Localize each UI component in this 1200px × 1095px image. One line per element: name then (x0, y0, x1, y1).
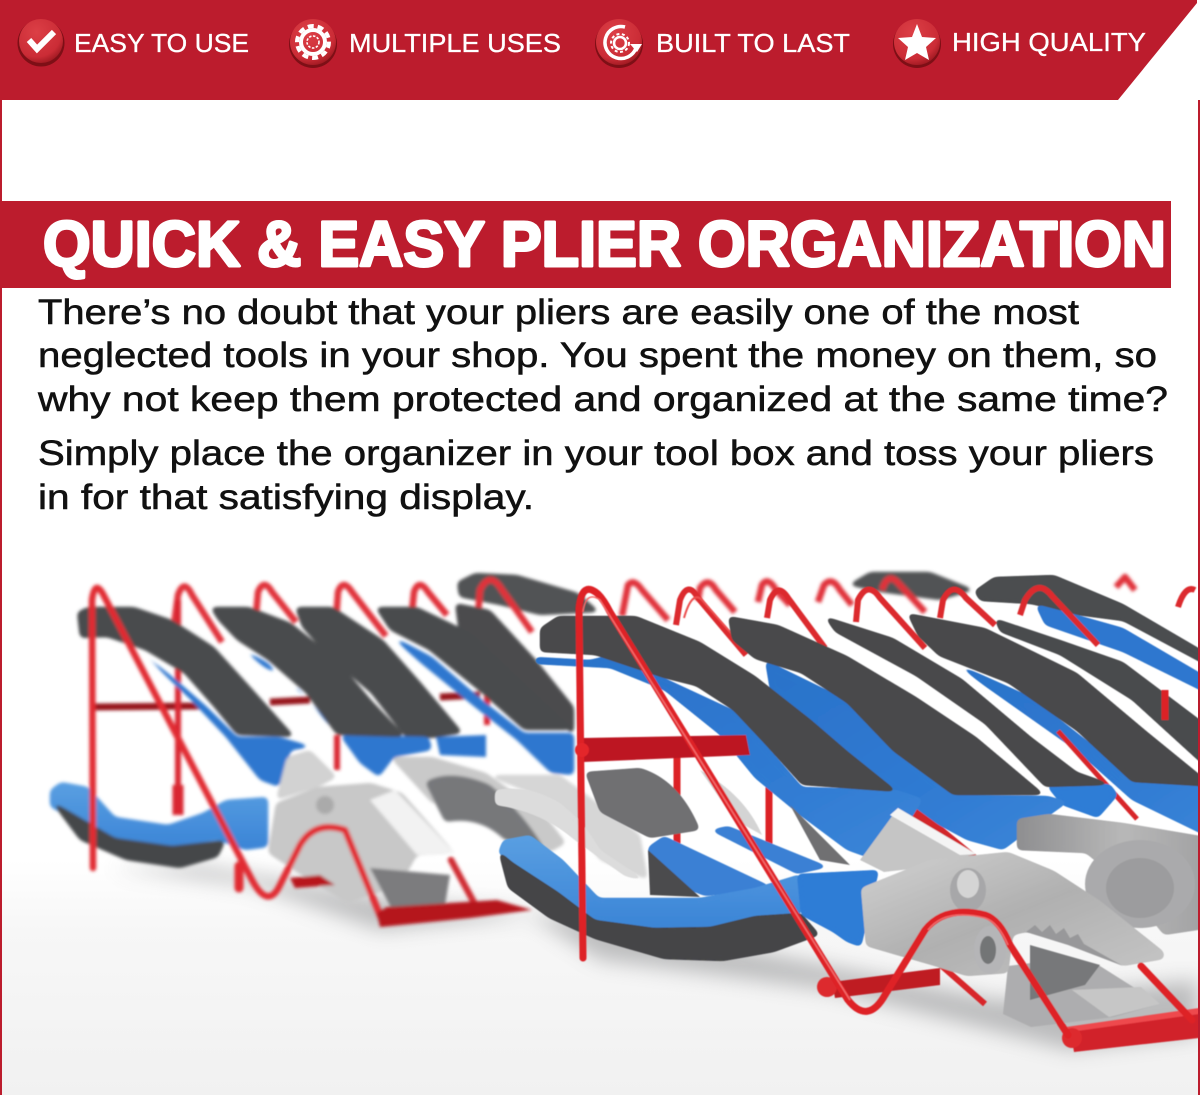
rear plier 1 (77, 607, 314, 787)
body text: in for that satisfying display. (38, 478, 534, 517)
front plier 4 (907, 613, 1200, 850)
front wire frame (579, 589, 1192, 1035)
wire behind plier 3 (1058, 731, 1137, 819)
front plier 2 (728, 616, 1068, 868)
front lower handle (498, 835, 879, 961)
rear row of pliers (50, 572, 1135, 927)
lower jaw of front plier (1003, 945, 1160, 1027)
rear base of front frame (832, 968, 940, 998)
rear base bar (377, 900, 532, 927)
front plier 3 (824, 616, 1118, 818)
body text (37, 293, 1168, 517)
front horizontal bar (583, 735, 750, 762)
body text: There’s no doubt that your pliers are easily one of the most (38, 293, 1079, 332)
label: high quality: HIGH QUALITY (952, 27, 1146, 57)
top banner (0, 0, 1197, 100)
far grips top right (974, 575, 1200, 780)
heading: QUICK & EASY PLIER ORGANIZATION (43, 208, 1166, 280)
far rear grips (457, 572, 975, 615)
rear posts (178, 600, 487, 815)
rear support bars (92, 695, 480, 707)
label: built to last: BUILT TO LAST (656, 28, 850, 58)
body text: neglected tools in your shop. You spent the money on them, so (38, 336, 1157, 375)
rear plier 5 grip (455, 603, 574, 735)
rear plier 3 (295, 607, 486, 757)
heading bar (0, 201, 1171, 288)
rear jaw detail (370, 868, 450, 915)
label: multiple uses: MULTIPLE USES (349, 28, 561, 58)
upper jaw of front plier (860, 808, 976, 872)
rear wires (174, 577, 1135, 642)
product photo: pliers in red wire organizer (2, 572, 1200, 1095)
wire under jaw (935, 960, 985, 1004)
floor (2, 860, 1198, 1095)
badge: high quality (893, 19, 941, 68)
front plier jaw (861, 852, 1164, 976)
front plier 1 (535, 616, 923, 860)
rear plier 4 (375, 607, 574, 775)
front row of pliers (495, 575, 1200, 1052)
front wire highlight (583, 597, 1008, 1000)
rear front-wire (92, 588, 478, 920)
mid jaws behind front (495, 768, 850, 897)
body text: Simply place the organizer in your tool box and toss your pliers (38, 434, 1154, 473)
front wire peaks back (676, 588, 1195, 655)
badge: built to last (595, 19, 643, 68)
right plier head (1017, 814, 1200, 935)
front vertical posts (677, 690, 1165, 895)
rear plier 2 (210, 607, 432, 777)
rear jaws (268, 750, 648, 903)
front base bar (817, 977, 1199, 1052)
rear lower handle (50, 782, 268, 868)
badge: multiple uses (289, 19, 337, 68)
label: easy to use: EASY TO USE (74, 28, 249, 58)
rear bar (746, 730, 875, 750)
front bar end cap (575, 743, 589, 757)
badge: easy to use (18, 19, 64, 66)
body text: why not keep them protected and organized at the same time? (37, 380, 1168, 419)
